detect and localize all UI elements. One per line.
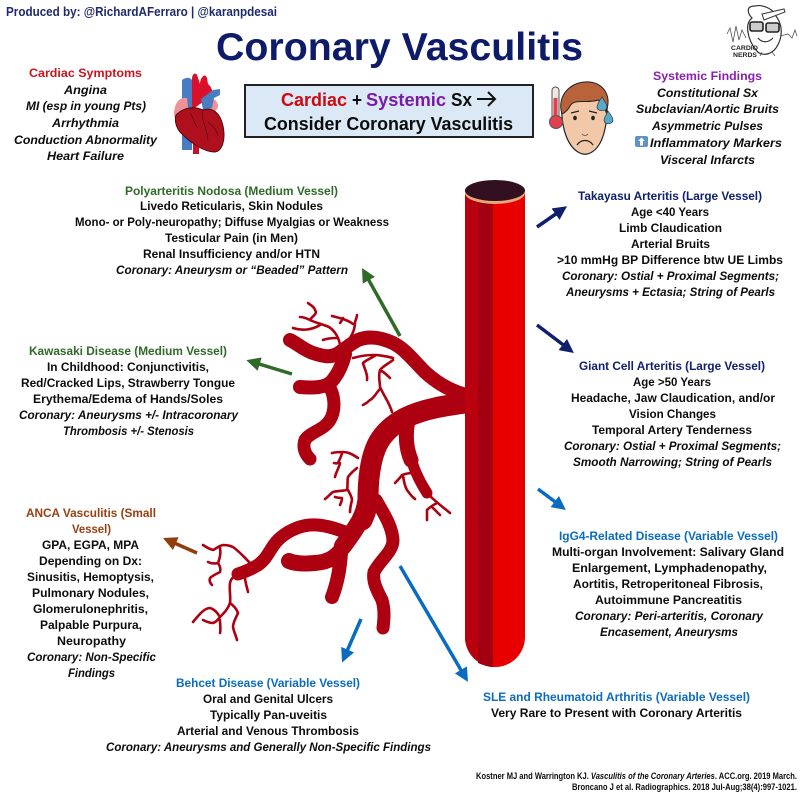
panel: cardiac symptoms: MI (esp in young Pts) [26,99,146,113]
panel: systemic findings [635,69,782,167]
logo: Cardio Nerds: NERDS [733,52,758,59]
panel: anca vasculitis: GPA, EGPA, MPA [42,538,139,552]
panel: systemic findings: Constitutional Sx [657,86,759,100]
panel: systemic findings: Inflammatory Markers [650,136,782,150]
panel: polyarteritis nodosa: Renal Insufficiency and/or HTN [143,247,320,261]
panel: sle and rheumatoid arthritis: SLE and Rheumatoid Arthritis (Variable Vessel) [483,690,750,704]
arrow: to kawasaki disease [251,362,292,374]
panel: anca vasculitis: ANCA Vasculitis (Small [26,506,156,520]
panel: behcet disease: Coronary: Aneurysms and Generally Non-Specific Findings [106,740,431,754]
panel: polyarteritis nodosa: Mono- or Poly-neuropathy; Diffuse Myalgias or Weakness [75,215,389,229]
panel: kawasaki disease: Thrombosis +/- Stenosis [63,424,194,438]
panel: sle and rheumatoid arthritis [483,690,750,720]
panel: anca vasculitis: Palpable Purpura, [40,618,142,632]
panel: systemic findings: Systemic Findings [653,69,762,83]
panel: igg4-related disease [552,529,784,639]
icon: heart [174,74,224,154]
panel: polyarteritis nodosa: Coronary: Aneurysm or “Beaded” Pattern [116,263,348,277]
panel: takayasu arteritis: Age <40 Years [631,205,709,219]
arrow: to giant cell arteritis [537,325,570,350]
panel: giant cell arteritis: Vision Changes [629,407,716,421]
references [476,771,797,793]
panel: systemic findings: Visceral Infarcts [660,153,755,167]
arrow: to sle and rheumatoid arthritis [400,566,466,678]
panel: kawasaki disease: In Childhood: Conjunctivitis, [47,360,209,374]
panel: cardiac symptoms: Cardiac Symptoms [29,66,142,80]
logo: Cardio Nerds: CARDIO [731,45,758,52]
panel: giant cell arteritis [564,359,781,469]
panel: takayasu arteritis: Coronary: Ostial + Proximal Segments; [562,269,779,283]
panel: anca vasculitis: Sinusitis, Hemoptysis, [27,570,154,584]
callout box: Cardiac [281,90,347,110]
panel: anca vasculitis: Neuropathy [57,634,126,648]
panel: giant cell arteritis: Age >50 Years [633,375,711,389]
panel: anca vasculitis [26,506,156,680]
panel: giant cell arteritis: Coronary: Ostial + Proximal Segments; [564,439,781,453]
panel: anca vasculitis: Pulmonary Nodules, [32,586,149,600]
panel: kawasaki disease: Coronary: Aneurysms +/- Intracoronary [19,408,239,422]
panel: giant cell arteritis: Giant Cell Arteritis (Large Vessel) [579,359,765,373]
panel: cardiac symptoms: Arrhythmia [51,116,119,130]
small branches are part of the tree [193,303,450,640]
panel: igg4-related disease: Aortitis, Retroperitoneal Fibrosis, [573,577,763,591]
panel: igg4-related disease: Autoimmune Pancreatitis [595,593,742,607]
callout box [245,85,533,137]
panel: sle and rheumatoid arthritis: Very Rare to Present with Coronary Arteritis [491,706,742,720]
panel: igg4-related disease: Coronary: Peri-arteritis, Coronary [575,609,764,623]
logo: Cardio Nerds [727,6,797,59]
panel: behcet disease: Arterial and Venous Thrombosis [177,724,359,738]
panel: igg4-related disease: IgG4-Related Disease (Variable Vessel) [559,529,778,543]
panel: kawasaki disease: Red/Cracked Lips, Strawberry Tongue [21,376,235,390]
panel: takayasu arteritis: Aneurysms + Ectasia; String of Pearls [565,285,775,299]
panel: cardiac symptoms: Heart Failure [47,149,124,163]
panel: igg4-related disease: Encasement, Aneurysms [600,625,738,639]
panel: takayasu arteritis: Takayasu Arteritis (Large Vessel) [578,189,762,203]
panel: anca vasculitis: Vessel) [72,522,111,536]
panel: kawasaki disease: Kawasaki Disease (Medium Vessel) [29,344,227,358]
panel: polyarteritis nodosa: Livedo Reticularis, Skin Nodules [140,199,323,213]
panel: cardiac symptoms [14,66,158,163]
panel: igg4-related disease: Multi-organ Involvement: Salivary Gland [552,545,784,559]
panel: igg4-related disease: Enlargement, Lymphadenopathy, [572,561,767,575]
panel: anca vasculitis: Glomerulonephritis, [33,602,148,616]
arrow: to anca vasculitis [168,540,197,553]
callout box: Systemic [366,90,446,110]
panel: behcet disease [106,676,431,754]
arrow: to behcet disease [344,619,361,658]
panel: cardiac symptoms: Conduction Abnormality [14,133,158,147]
producer credit: Produced by: @RichardAFerraro | @karanpdesai [6,5,277,19]
icon: sick face with thermometer [550,82,613,154]
panel: anca vasculitis: Findings [68,666,115,680]
panel: takayasu arteritis: >10 mmHg BP Difference btw UE Limbs [557,253,783,267]
panel: giant cell arteritis: Smooth Narrowing; String of Pearls [573,455,772,469]
callout box: Sx [451,90,472,110]
arrow: to polyarteritis nodosa [364,272,400,336]
coronary artery tree [193,303,472,640]
panel: takayasu arteritis [557,189,783,299]
panel: giant cell arteritis: Temporal Artery Tenderness [592,423,752,437]
callout box: Consider Coronary Vasculitis [264,114,513,134]
panel: giant cell arteritis: Headache, Jaw Claudication, and/or [571,391,775,405]
panel: kawasaki disease: Erythema/Edema of Hands/Soles [33,392,223,406]
title: Coronary Vasculitis [216,26,583,69]
panel: polyarteritis nodosa: Polyarteritis Nodosa (Medium Vessel) [125,184,338,198]
panel: behcet disease: Typically Pan-uveitis [210,708,327,722]
panel: behcet disease: Oral and Genital Ulcers [203,692,333,706]
panel: polyarteritis nodosa: Testicular Pain (in Men) [165,231,298,245]
arrow: to takayasu arteritis [537,209,563,227]
callout box: + [352,90,362,110]
main vessel [465,180,525,667]
arrow: to igg4-related disease [538,489,562,507]
panel: systemic findings: Asymmetric Pulses [651,119,763,133]
panel: polyarteritis nodosa [75,184,389,277]
panel: kawasaki disease [19,344,239,438]
panel: behcet disease: Behcet Disease (Variable Vessel) [176,676,360,690]
panel: anca vasculitis: Coronary: Non-Specific [27,650,156,664]
panel: anca vasculitis: Depending on Dx: [39,554,142,568]
panel: cardiac symptoms: Angina [63,83,107,97]
panel: takayasu arteritis: Arterial Bruits [631,237,710,251]
panel: systemic findings: Subclavian/Aortic Bruits [636,102,779,116]
panel: takayasu arteritis: Limb Claudication [619,221,722,235]
